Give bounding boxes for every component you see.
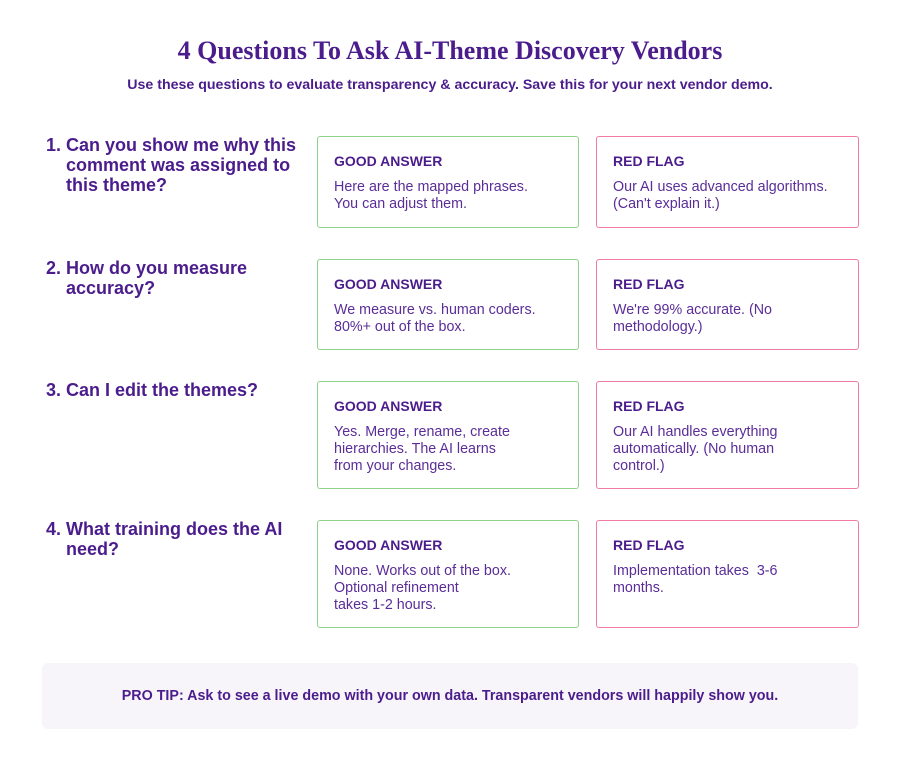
red flag 2: We're 99% accurate. (No xyxy=(613,302,772,318)
question 1: this theme? xyxy=(66,175,167,195)
good answer 3 xyxy=(317,381,579,489)
good answer 4: takes 1-2 hours. xyxy=(334,597,437,613)
question 2: accuracy? xyxy=(66,278,155,298)
red flag 4: RED FLAG xyxy=(613,537,685,553)
red flag 2: methodology.) xyxy=(613,319,703,335)
good answer 2: GOOD ANSWER xyxy=(334,276,442,292)
good answer 3: hierarchies. The AI learns xyxy=(334,441,496,457)
title: 4 Questions To Ask AI-Theme Discovery Vendors xyxy=(178,36,722,65)
red flag 2 xyxy=(596,259,859,350)
question 1: 1. Can you show me why this xyxy=(46,135,296,155)
good answer 1: Here are the mapped phrases. xyxy=(334,179,528,195)
red flag 3: control.) xyxy=(613,458,665,474)
red flag 4: Implementation takes 3-6 xyxy=(613,563,778,579)
good answer 1 xyxy=(317,136,579,228)
red flag 4: months. xyxy=(613,580,664,596)
red flag 1: Our AI uses advanced algorithms. xyxy=(613,179,828,195)
question 3: 3. Can I edit the themes? xyxy=(46,380,258,400)
good answer 4: Optional refinement xyxy=(334,580,459,596)
good answer 3: Yes. Merge, rename, create xyxy=(334,424,510,440)
question 4: 4. What training does the AI xyxy=(46,519,282,539)
good answer 3: GOOD ANSWER xyxy=(334,398,442,414)
good answer 4: GOOD ANSWER xyxy=(334,537,442,553)
red flag 3: automatically. (No human xyxy=(613,441,774,457)
good answer 1: GOOD ANSWER xyxy=(334,153,442,169)
pro tip callout: PRO TIP: Ask to see a live demo with your own data. Transparent vendors will happily show you. xyxy=(122,688,778,704)
good answer 4 xyxy=(317,520,579,628)
question 1: comment was assigned to xyxy=(66,155,290,175)
subtitle: Use these questions to evaluate transparency & accuracy. Save this for your next vendor demo. xyxy=(127,77,773,93)
good answer 3: from your changes. xyxy=(334,458,456,474)
red flag 3: Our AI handles everything xyxy=(613,424,778,440)
question 1 xyxy=(46,135,296,195)
pro tip callout xyxy=(42,663,858,729)
red flag 1 xyxy=(596,136,859,228)
good answer 2 xyxy=(317,259,579,350)
red flag 2: RED FLAG xyxy=(613,276,685,292)
question 2 xyxy=(46,258,247,298)
question 4 xyxy=(46,519,282,559)
question 4: need? xyxy=(66,539,119,559)
red flag 1: RED FLAG xyxy=(613,153,685,169)
red flag 3: RED FLAG xyxy=(613,398,685,414)
red flag 3 xyxy=(596,381,859,489)
red flag 1: (Can't explain it.) xyxy=(613,196,720,212)
good answer 2: 80%+ out of the box. xyxy=(334,319,466,335)
good answer 4: None. Works out of the box. xyxy=(334,563,511,579)
question 2: 2. How do you measure xyxy=(46,258,247,278)
red flag 4 xyxy=(596,520,859,628)
good answer 2: We measure vs. human coders. xyxy=(334,302,536,318)
good answer 1: You can adjust them. xyxy=(334,196,467,212)
